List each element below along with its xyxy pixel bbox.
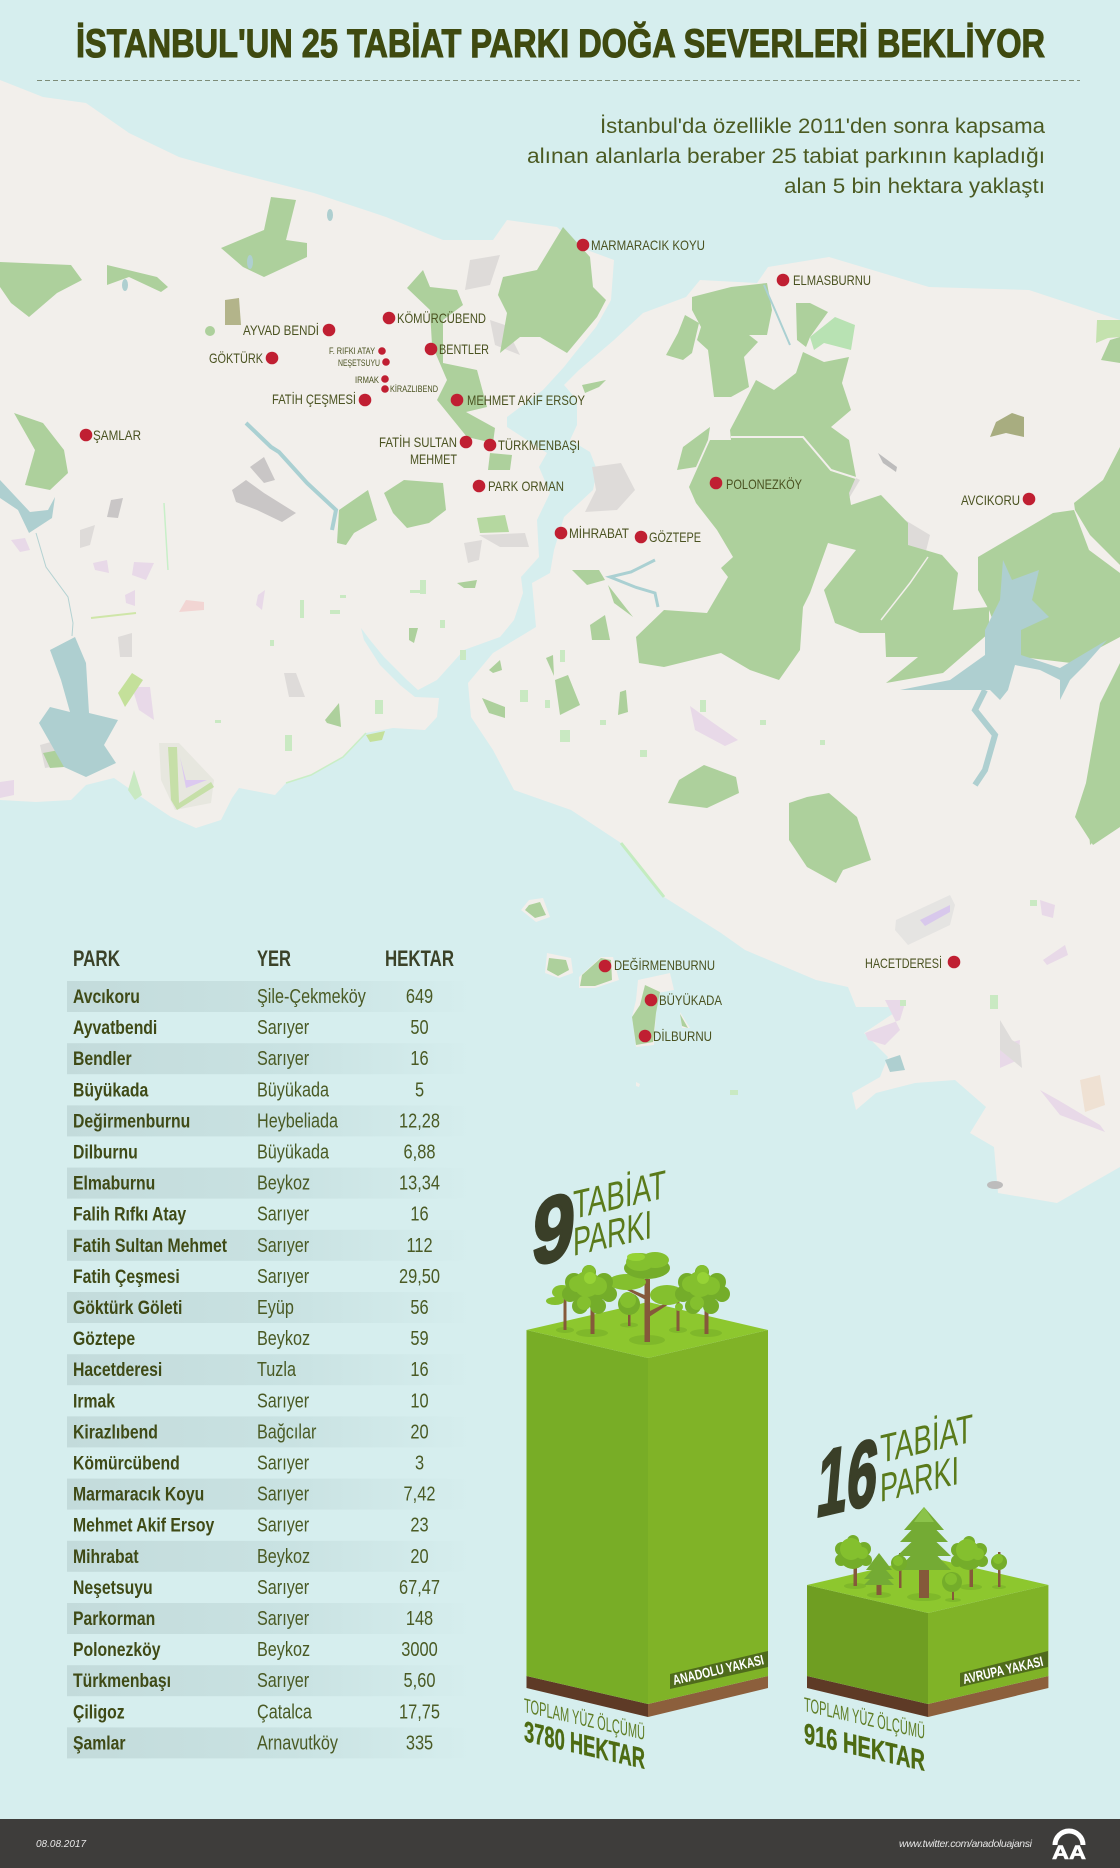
column: park names: Mihrabat <box>73 1545 139 1567</box>
column: park names: Neşetsuyu <box>73 1576 153 1598</box>
column: hectares: 16 <box>410 1047 429 1070</box>
column: hectares: 5 <box>415 1078 424 1101</box>
marker: Neşetsuyu: NEŞETSUYU <box>338 358 380 368</box>
trees on Avrupa block <box>835 1507 1007 1602</box>
column: park names: Çiligoz <box>73 1701 125 1723</box>
big pine <box>897 1507 951 1570</box>
label band: Anadolu Yakası: ANADOLU YAKASI <box>671 1651 765 1688</box>
column: locations: Arnavutköy <box>257 1732 339 1754</box>
column: hectares: 10 <box>410 1389 429 1412</box>
column: park names: Avcıkoru <box>73 986 140 1007</box>
heading: 9 Tabiat Parkı: TABİAT <box>573 1161 666 1228</box>
footer bar <box>0 1819 1120 1868</box>
heading: 9 Tabiat Parkı: 9 <box>528 1172 579 1286</box>
marker: Fatih Çeşmesi: FATİH ÇEŞMESİ <box>272 390 356 407</box>
land: European side <box>0 80 614 828</box>
column: hectares: 29,50 <box>399 1264 440 1287</box>
column: park names: Kömürcübend <box>73 1452 180 1474</box>
column: locations: Bağcılar <box>257 1421 316 1443</box>
icon: Anadolu Agency logo: AA <box>1052 1843 1086 1864</box>
column: park names: Hacetderesi <box>73 1359 162 1381</box>
urban and pale patches <box>0 255 1105 1132</box>
marker: Park Orman: PARK ORMAN <box>488 478 564 494</box>
column: hectares: 13,34 <box>399 1171 440 1194</box>
lakes and rivers <box>0 209 1107 1189</box>
caption: Anadolu total: TOPLAM YÜZ ÖLÇÜMÜ <box>524 1695 645 1745</box>
column: hectares: 50 <box>410 1016 429 1038</box>
column: hectares: 67,47 <box>399 1575 440 1598</box>
marker: Polonezköy <box>710 475 803 492</box>
heading: 16 Tabiat Parkı <box>813 1405 973 1537</box>
column: park names: Parkorman <box>73 1608 155 1629</box>
marker: Dilburnu <box>639 1027 712 1044</box>
column: locations: Büyükada <box>257 1079 330 1101</box>
marker: Göktürk: GÖKTÜRK <box>209 349 264 366</box>
heading: 9 Tabiat Parkı <box>528 1161 666 1286</box>
land: Asian side <box>468 257 1120 1203</box>
column: hectares: 112 <box>406 1233 433 1256</box>
column: park names: Elmaburnu <box>73 1172 155 1194</box>
intro text: alan 5 bin hektara yaklaştı <box>784 175 1045 198</box>
Sabiha airport <box>895 895 955 945</box>
column: park names: Irmak <box>73 1390 115 1412</box>
label band: Avrupa Yakası: AVRUPA YAKASI <box>961 1653 1045 1687</box>
marker: Türkmenbaşı: TÜRKMENBAŞI <box>498 436 580 453</box>
column: park names: Göztepe <box>73 1328 135 1349</box>
table header: YER <box>257 946 291 971</box>
intro text: İstanbul'da özellikle 2011'den sonra kapsama <box>600 115 1045 138</box>
bar: Avrupa Yakası block <box>807 1557 1048 1717</box>
marker: Değirmenburnu <box>599 956 715 973</box>
column: hectares: 148 <box>406 1606 433 1629</box>
marker: Kirazlibend: KİRAZLIBEND <box>390 384 438 394</box>
table row bands <box>67 981 473 1758</box>
marker: Elmasburnu <box>777 272 871 288</box>
marker: Bentler <box>425 341 489 357</box>
marker: Fatih Sultan Mehmet: MEHMET <box>410 451 457 467</box>
table of parks <box>67 946 473 1758</box>
caption: Avrupa total <box>804 1694 925 1778</box>
park location markers <box>80 237 1035 1044</box>
light green patches <box>810 317 855 350</box>
marker: Değirmenburnu: DEĞİRMENBURNU <box>614 956 715 973</box>
column: hectares: 23 <box>410 1513 429 1536</box>
column: park names: Ayvatbendi <box>73 1017 157 1038</box>
scattered green patches <box>215 580 1037 1095</box>
column: park names <box>73 986 227 1754</box>
marker: Mihrabat <box>555 524 629 541</box>
marker: Elmasburnu: ELMASBURNU <box>793 272 871 288</box>
column: hectares: 12,28 <box>399 1109 440 1132</box>
caption: Anadolu total <box>524 1695 645 1776</box>
olive patches <box>225 298 241 325</box>
column: locations: Beykoz <box>257 1545 310 1567</box>
marker: Irmak: IRMAK <box>355 375 379 385</box>
islands <box>521 898 690 1087</box>
column: locations <box>257 985 367 1754</box>
column: locations: Sarıyer <box>257 1390 309 1412</box>
marker: Büyükada <box>645 991 723 1008</box>
column: hectares: 3 <box>415 1451 424 1474</box>
column: park names: Fatih Çeşmesi <box>73 1265 180 1287</box>
heading: 9 Tabiat Parkı: PARKI <box>573 1201 652 1265</box>
Polonezkoy forest mass <box>636 352 989 683</box>
caption: Avrupa total: TOPLAM YÜZ ÖLÇÜMÜ <box>804 1694 925 1744</box>
column: hectares: 7,42 <box>404 1482 435 1505</box>
column: locations: Sarıyer <box>257 1452 309 1474</box>
marker: Fatih Sultan Mehmet: FATİH SULTAN <box>379 433 457 450</box>
label band: Anadolu Yakası <box>670 1651 768 1689</box>
marker: Fatih Sultan Mehmet <box>379 433 472 467</box>
column: hectares: 59 <box>410 1327 429 1349</box>
column: park names: Türkmenbaşı <box>73 1670 171 1692</box>
column: locations: Sarıyer <box>257 1576 309 1598</box>
Belgrade forest strip <box>407 270 495 443</box>
marker: Dilburnu: DİLBURNU <box>653 1027 712 1044</box>
marker: Şamlar: ŞAMLAR <box>93 427 141 443</box>
column: locations: Sarıyer <box>257 1265 309 1287</box>
column: park names: Falih Rıfkı Atay <box>73 1203 186 1225</box>
marker: Kömürcübend <box>383 309 486 326</box>
white roads <box>731 437 856 478</box>
marker: Polonezköy: POLONEZKÖY <box>726 475 803 492</box>
column: locations: Sarıyer <box>257 1048 309 1070</box>
column: locations: Çatalca <box>257 1701 313 1723</box>
table header: PARK <box>73 946 120 971</box>
marker: Kömürcübend: KÖMÜRCÜBEND <box>397 309 486 326</box>
column: hectares: 20 <box>410 1420 429 1443</box>
column: locations: Sarıyer <box>257 1017 309 1038</box>
marker: Şamlar <box>80 427 141 443</box>
column: hectares: 3000 <box>401 1638 438 1660</box>
column: locations: Büyükada <box>257 1141 330 1163</box>
column: locations: Sarıyer <box>257 1234 309 1256</box>
column: locations: Sarıyer <box>257 1483 309 1505</box>
column: hectares: 20 <box>410 1544 429 1567</box>
marker: Büyükada: BÜYÜKADA <box>659 991 723 1008</box>
marker: Mehmet Akif Ersoy: MEHMET AKİF ERSOY <box>467 391 586 408</box>
column: park names: Bendler <box>73 1048 132 1070</box>
column: park names: Fatih Sultan Mehmet <box>73 1234 227 1256</box>
column: locations: Tuzla <box>257 1359 297 1381</box>
column: locations: Beykoz <box>257 1639 310 1660</box>
green lines along roads and coast <box>164 503 168 570</box>
column: locations: Sarıyer <box>257 1203 309 1225</box>
column: locations: Beykoz <box>257 1328 310 1349</box>
column: locations: Sarıyer <box>257 1514 309 1536</box>
marker: Mehmet Akif Ersoy <box>451 391 586 408</box>
column: park names: Kirazlıbend <box>73 1421 158 1443</box>
column: locations: Şile-Çekmeköy <box>257 985 367 1007</box>
marker: Göztepe <box>635 528 701 545</box>
column: park names: Şamlar <box>73 1732 126 1754</box>
column: hectares: 335 <box>406 1731 433 1754</box>
marker: Avcıkoru: AVCIKORU <box>961 492 1020 508</box>
marker: F. Rıfkı Atay: F. RIFKI ATAY <box>329 346 375 356</box>
column: hectares: 17,75 <box>399 1700 440 1723</box>
small pine <box>864 1553 894 1585</box>
bar: Anadolu Yakası block <box>526 1302 768 1717</box>
map of Istanbul <box>0 80 1120 1203</box>
Ataturk airport <box>159 743 214 810</box>
marker: Mihrabat: MİHRABAT <box>569 524 629 541</box>
Sariyer north forest <box>498 227 606 353</box>
column: park names: Göktürk Göleti <box>73 1297 182 1318</box>
marker: Marmaracık Koyu: MARMARACIK KOYU <box>591 237 705 253</box>
column: hectares: 16 <box>410 1358 429 1381</box>
column: locations: Sarıyer <box>257 1670 309 1692</box>
marker: Ayvad Bendi: AYVAD BENDİ <box>243 321 319 338</box>
intro text: alınan alanlarla beraber 25 tabiat parkının kapladığı <box>527 145 1045 168</box>
column: hectares: 649 <box>406 984 433 1007</box>
column: park names: Mehmet Akif Ersoy <box>73 1514 214 1536</box>
column: park names: Büyükada <box>73 1079 149 1101</box>
twitter address: www.twitter.com/anadoluajansi <box>899 1838 1033 1850</box>
island forests <box>525 902 546 918</box>
table header <box>73 946 454 971</box>
date: 08.08.2017 <box>36 1839 86 1850</box>
heading: 16 Tabiat Parkı: TABİAT <box>880 1405 973 1472</box>
heading: 16 Tabiat Parkı: 16 <box>813 1419 882 1537</box>
icon: Anadolu Agency logo <box>1052 1831 1086 1864</box>
column: park names: Polonezköy <box>73 1639 161 1660</box>
column: locations: Sarıyer <box>257 1607 309 1629</box>
intro text <box>527 115 1045 198</box>
caption: Anadolu total: 3780 HEKTAR <box>524 1715 645 1776</box>
column: hectares: 16 <box>410 1202 429 1225</box>
column: locations: Heybeliada <box>257 1110 339 1132</box>
marker: Hacetderesi: HACETDERESİ <box>865 954 942 971</box>
column: locations: Beykoz <box>257 1172 310 1194</box>
forest areas <box>0 197 1120 1045</box>
column: hectares: 6,88 <box>404 1140 435 1163</box>
caption: Avrupa total: 916 HEKTAR <box>804 1717 925 1778</box>
table header: HEKTAR <box>385 946 454 971</box>
column: park names: Dilburnu <box>73 1141 138 1163</box>
label band: Avrupa Yakası <box>960 1651 1048 1687</box>
heading: 16 Tabiat Parkı: PARKI <box>880 1447 959 1511</box>
column: locations: Eyüp <box>257 1296 294 1318</box>
column: park names: Değirmenburnu <box>73 1110 190 1132</box>
column: hectares: 56 <box>410 1295 429 1318</box>
marker: Türkmenbaşı <box>484 436 580 453</box>
column: hectares <box>399 984 440 1754</box>
column: park names: Marmaracık Koyu <box>73 1483 204 1505</box>
marker: Bentler: BENTLER <box>439 341 489 357</box>
marker: Göztepe: GÖZTEPE <box>649 528 701 545</box>
trees on Anadolu block <box>546 1252 730 1345</box>
column: hectares: 5,60 <box>404 1669 435 1692</box>
